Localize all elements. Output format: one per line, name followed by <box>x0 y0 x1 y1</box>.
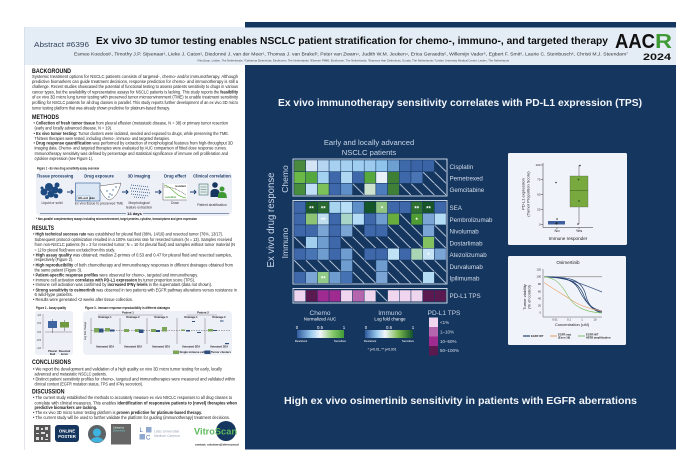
step: 3D imaging: 3D imaging <box>128 174 151 178</box>
panel: conclusions: advanced and metastatic NSCLC patients. <box>34 371 107 376</box>
panel: methods: Thirteen therapies were tested, including chemo-, immuno- and targeted therapies. <box>34 136 170 141</box>
figure 3: immune response reproducibility: Untreated SEA <box>152 344 170 348</box>
figure 2: assay quality: -0.5 <box>37 338 42 342</box>
card: PD-L1 box plot: Yes <box>576 228 582 233</box>
panel: background <box>32 69 239 110</box>
card: osimertinib curves <box>508 256 626 345</box>
y axis title: (Tumor Proportion Score) <box>526 171 530 217</box>
figure 2: assay quality: Resected <box>59 349 71 353</box>
card: osimertinib curves: Tumor viability <box>522 284 527 310</box>
online poster badge: ONLINE <box>59 428 75 434</box>
axis label: ex vivo drug response: Ex vivo drug response <box>266 172 277 268</box>
figure 2: assay quality <box>35 306 73 356</box>
panel: methods: • Collection of fresh tumor tissue from pleural effusion (metastatic disease, N = 38) or primary tumor resection <box>34 120 229 125</box>
figure 3: immune response reproducibility: Figure 3 - Immune response reproducibility in different drainages <box>85 306 170 310</box>
legend: PD-L1 TPS: 1–10% <box>440 330 454 334</box>
figure 3: immune response reproducibility: Log fold change <box>83 321 87 340</box>
y axis title: PD-L1 expression <box>520 178 526 210</box>
step: tissue processing: Liquid or solid <box>42 201 63 205</box>
logo: LUMC: L <box>140 428 144 434</box>
legend: PD-L1 TPS <box>428 310 461 356</box>
logo: university: Ziekenhuis <box>113 430 126 432</box>
significance stars: ** <box>309 206 314 212</box>
heatmap labels: immuno <box>450 205 493 282</box>
panel: discussion: • The ex vivo 3D micro tumor testing platform is proven predictive for platinum-based therapy. <box>33 410 202 415</box>
authors: Esmee Koedoot¹, Timothy J.P. Sijsenaar¹, Lieke J. Caton², Diedonné J. van der Meer¹, Thomas J. van Brakel³, Peter van Zwam⁴, Judith W.M. Jeuken⁴, Erica Geraedts⁵, Willemijn Vader⁵, Egbert F. Smit⁶, Laurie C. Steinbusch⁶, Christi M.J. Steendam⁷ <box>74 52 629 56</box>
figure 1 footnote: * Non-parallel complementary assays including microenvironment, target proteins, cytokine, transcriptome and gene expression <box>36 217 197 221</box>
y axis title <box>520 171 530 217</box>
step: drug exposure <box>75 174 124 206</box>
QR code <box>34 425 50 442</box>
card: osimertinib curves: 0.1 <box>567 318 571 322</box>
card: osimertinib curves: 10 <box>594 318 597 322</box>
card: osimertinib curves: 100 <box>537 275 542 279</box>
curve legend: (Exon 19) <box>558 336 570 340</box>
heatmap labels: immuno: Dostarlimab <box>450 240 483 248</box>
axis label: immuno: Immuno <box>280 227 290 258</box>
logo: university: Catharina <box>113 426 124 430</box>
legend: immuno: Resistant <box>364 339 376 343</box>
heatmap labels: immuno: Pembrolizumab <box>450 217 493 224</box>
top bar <box>245 22 676 28</box>
logo: LUMC <box>140 427 180 442</box>
significance stars: ** <box>321 276 326 282</box>
curve legend: EGFR WT <box>531 334 544 338</box>
abstract number: Abstract #6396 <box>34 40 89 49</box>
step: drug effect <box>163 174 187 205</box>
legend: chemo: Sensitive <box>334 339 346 343</box>
panel: conclusions: • We report the development and validation of a high quality ex vivo 3D micro tumor testing for early, locally <box>33 366 223 371</box>
panel: discussion <box>32 390 237 420</box>
logo: AACR 2024: 2024 <box>643 52 671 62</box>
panel: methods: cytokine expression (see Figure 1). <box>34 156 93 161</box>
card: osimertinib curves: 120 <box>537 267 542 271</box>
step: drug effect: Drug effect <box>164 174 187 178</box>
panel: background: Systemic treatment options for NSCLC patients consists of targeted-, chemo- and/or immunotherapy. Although <box>32 74 239 79</box>
card: osimertinib curves: Osimertinib <box>556 260 580 265</box>
panel: conclusions: • Distinct patient sensitivity profiles for chemo-, targeted and immunotherapies were measured and validated within <box>33 376 236 382</box>
card: osimertinib curves: 20 <box>538 304 541 308</box>
panel: background: of ex vivo 3D micro lung tumor testing with preserved tumor microenvironment (TME) to enable treatment sensitivity <box>32 95 239 100</box>
card: PD-L1 box plot: 0 <box>539 222 541 226</box>
title: Ex vivo 3D tumor testing enables NSCLC patient stratification for chemo-, immuno-, and targeted therapy <box>96 36 608 47</box>
legend: chemo <box>295 310 346 343</box>
logo: LUMC: Medisch Centrum <box>154 434 180 438</box>
panel: background: tumor testing platform that was already shown predictive for platinum-based therapy. <box>32 105 170 110</box>
legend: chemo: Normalized AUC <box>304 316 336 322</box>
card: osimertinib curves: Concentration (uM) <box>555 322 590 327</box>
step: 3D imaging <box>126 174 152 210</box>
figure 1: assay overview: Figure 1 - Ex vivo drug sensitivity assay overview <box>37 166 99 170</box>
curve legend: HER2 amplification <box>586 336 611 340</box>
step: 3D imaging: feature extraction <box>126 206 152 210</box>
heatmap labels: immuno: Ipilimumab <box>450 276 480 282</box>
legend: immuno: Sensitive <box>402 339 414 343</box>
legend: chemo: 1 <box>343 325 346 330</box>
panel: discussion: DISCUSSION <box>32 390 64 396</box>
panel: methods: Immunotherapy sensitivity was defined by percentage and statistical significance of immune cell proliferation and <box>34 151 229 156</box>
online poster badge <box>55 425 79 442</box>
curve legend: EGFR WT <box>586 332 599 336</box>
legend: PD-L1 TPS: PD-L1 TPS <box>428 310 461 317</box>
card: PD-L1 box plot: 25 <box>537 208 541 212</box>
significance stars <box>309 206 431 282</box>
panel: results <box>32 226 238 302</box>
heatmap label: PD-L1 TPS: PD-L1 TPS <box>450 293 481 300</box>
heatmap: chemo <box>293 159 447 196</box>
figure 3: immune response reproducibility: Tumor clusters <box>211 350 231 354</box>
legend: chemo: Resistant <box>295 339 307 343</box>
figure 2: assay quality: tumor <box>61 352 68 356</box>
figure 3: immune response reproducibility: Untreated SEA <box>124 344 142 348</box>
panel: background: challenge. Recent studies showcased the potential of functional testing to assess patients sensitivity to drugs in various <box>32 84 238 89</box>
panel: results: Subsequent protocol optimization resulted in a 100% success rate for resected tumors (N = 13). Samples received <box>34 237 233 242</box>
step: clinical correlation <box>193 174 231 207</box>
step: drug effect: sensitive <box>165 195 177 199</box>
panel: methods <box>32 115 233 161</box>
figure 3: immune response reproducibility: Drainage 1 <box>98 315 112 319</box>
panel: conclusions: CONCLUSIONS <box>32 360 71 366</box>
legend: chemo: 0 <box>296 325 299 330</box>
heatmap labels: chemo: Cisplatin <box>450 164 474 171</box>
panel: results: • High reproducibility of both chemotherapy and immunotherapy responses in different drainages obtained from <box>33 262 233 267</box>
card: PD-L1 box plot: 75 <box>537 178 541 182</box>
significance stars: * <box>427 253 430 259</box>
panel: background: profiling for NSCLC patients for all drug classes in parallel. This study reports further development of an ex vivo 3D micro <box>32 100 239 105</box>
panel: methods: imaging data. Chemo- and targeted therapies were evaluated by AUC comparison of fitted dose response curves. <box>34 146 227 151</box>
panel: background: cancer types, but the availability of representative assays for NSCLC patients is lacking. This study reports the feasibility <box>32 89 239 94</box>
heading: osimertinib: High ex vivo osimertinib sensitivity in patients with EGFR aberrations <box>284 395 637 407</box>
figure 1: assay overview <box>36 166 232 216</box>
card: osimertinib curves: (% of control) <box>526 284 532 309</box>
legend note: p-values: * p<0.01, ** p<0.001 <box>368 347 397 351</box>
card: osimertinib curves: 60 <box>538 289 541 293</box>
panel: background: predictive biomarkers can guide treatment decisions, response prediction for chemo- and immunotherapy is still a <box>32 79 239 84</box>
heading: immunotherapy: Ex vivo immunotherapy sensitivity correlates with PD-L1 expression (TPS) <box>278 97 642 109</box>
step: 3D imaging: Morphological <box>128 201 150 205</box>
step: drug exposure: Drug exposure <box>84 174 114 178</box>
legend: chemo: 0.5 <box>317 325 324 330</box>
panel: results: • Immune cell activation correlates with PD-L1 expression by tumor proportion score (TPS). <box>33 278 195 283</box>
figure 3: immune response reproducibility: Drainage 3 <box>154 315 168 319</box>
significance stars: ** <box>426 206 431 212</box>
step: clinical correlation: Patient stratification <box>197 203 227 207</box>
timeline: 14 days: 14 days <box>127 211 143 216</box>
heatmap labels: chemo <box>450 164 485 194</box>
step: tissue processing: Tissue processing <box>37 174 74 178</box>
legend: PD-L1 TPS: 50–100% <box>440 348 459 353</box>
heatmap labels: chemo: Gemcitabine <box>450 187 485 194</box>
axes <box>541 163 593 229</box>
card: PD-L1 box plot <box>508 153 627 245</box>
heatmap labels: immuno: Durvalumab <box>450 264 483 271</box>
heatmap: immuno <box>293 200 447 284</box>
box: no responder <box>548 182 565 225</box>
card: PD-L1 box plot: No <box>554 228 560 233</box>
significance stars: ** <box>321 206 326 212</box>
panel: results: • Immune cell activation was confirmed by increased IFNγ levels in the supernatant (data not shown). <box>33 282 212 287</box>
step: drug effect: Dose <box>171 201 179 205</box>
box: yes responder <box>570 165 588 225</box>
figure 3: immune response reproducibility: Drainage 2 <box>126 315 140 319</box>
figure 3: immune response reproducibility: Untreated SEA <box>182 344 200 348</box>
legend: immuno: Log fold change <box>374 316 406 322</box>
figure 3: immune response reproducibility: Untreated SEA <box>96 344 114 348</box>
online poster badge: POSTER <box>58 434 77 439</box>
logo: university <box>111 424 131 444</box>
logo: LUMC: C <box>146 436 151 442</box>
heatmap title: NSCLC patients <box>342 148 396 157</box>
card: osimertinib curves: 80 <box>538 282 541 286</box>
panel: results: • High technical success rate was established for pleural fluid (88%, 14/16) and resected tumor (76%, 13/17). <box>33 232 223 237</box>
panel: discussion: predictive biomarkers are lacking. <box>34 405 97 410</box>
heatmap labels: immuno: Atezolizumab <box>450 252 487 259</box>
panel: results: • High assay quality was obtained; median Z-primes of 0.53 and 0.47 for pleural fluid and resected samples, <box>33 252 232 257</box>
figure 2: assay quality: 0.0 <box>37 330 42 334</box>
significance stars: ** <box>414 206 420 212</box>
figure 2: assay quality: fluid <box>50 352 56 356</box>
card: PD-L1 box plot: 50 <box>537 192 541 196</box>
affiliations: ¹VitroScan, Leiden, The Netherlands; ²Catharina Ziekenhuis, Eindhoven, The Netherlands; ³Elsevier PMMI, Eindhoven, The Netherlands; ⁴Erasmus Hart Ziekenhuis, Gouda, The Netherlands; ⁵Leiden University Medical Center, Leiden, The Netherlands <box>197 58 510 62</box>
card: osimertinib curves: 1 <box>581 318 583 322</box>
panel: conclusions <box>32 360 236 386</box>
legend: immuno: 0 <box>365 325 368 330</box>
logos row <box>34 421 239 446</box>
arrow <box>122 190 128 194</box>
figure 2: assay quality: 1.0 <box>37 313 42 317</box>
logo: VitroScan: VitroScan <box>194 426 237 438</box>
heatmap title <box>324 138 414 157</box>
logo: VitroScan: contact: solutions@vitroscan.nl <box>195 442 239 446</box>
curve legend: EGFR mut <box>558 332 571 336</box>
heatmap labels: immuno: Nivolumab <box>450 228 479 236</box>
logo: AACR 2024: R <box>655 31 673 53</box>
panel: background: BACKGROUND <box>32 69 72 75</box>
axis label: chemo: Chemo <box>280 165 290 193</box>
logo: AACR 2024 <box>615 31 673 62</box>
figure 2: assay quality: Figure 2 - Assay quality <box>36 306 66 310</box>
figure 3: immune response reproducibility: Single immune cells <box>180 350 207 354</box>
curve legend <box>523 332 611 340</box>
legend: immuno <box>364 310 415 343</box>
panel: discussion: • The current study established the methods to accurately measure ex vivo NSCLC responses to all drug classes to <box>33 395 233 400</box>
figure 2: assay quality: Pleural <box>48 349 57 353</box>
figure 3: immune response reproducibility: Drainage 1 <box>184 315 198 319</box>
heatmap: PD-L1 TPS <box>293 288 447 303</box>
panel: results: • Results were generated <2 weeks after tissue collection. <box>33 297 133 302</box>
panel: results: = 12 for pleural fluid) were excluded from this study. <box>34 248 115 253</box>
figure 2: assay quality: -1.0 <box>37 346 42 350</box>
card: osimertinib curves: 0 <box>540 311 542 315</box>
panel: methods: METHODS <box>32 115 59 121</box>
dose-response curves <box>544 277 602 313</box>
card: osimertinib curves: 0.01 <box>552 318 558 322</box>
legend: PD-L1 TPS: <1% <box>440 320 449 325</box>
significance stars: ** <box>321 218 326 224</box>
panel: results: • Strong sensitivity to osimertinib was observed in two patients with EGFR pathway alterations versus resistance in <box>33 288 238 292</box>
heatmap title: Early and locally advanced <box>324 138 414 147</box>
legend: chemo: Chemo <box>310 310 331 317</box>
author photo <box>88 425 106 443</box>
panel: conclusions: clinical context (EGFR mutation status, TPS and IFNγ secretion). <box>34 381 143 386</box>
panel: discussion: • The current study will be used to further validate the platform for guiding (immunotherapy) treatment decisions. <box>33 415 230 420</box>
header <box>34 31 673 62</box>
panel: results: 6 wild-type patients. <box>34 292 73 297</box>
legend: immuno: 0.5 <box>386 325 393 330</box>
arrow <box>67 190 73 194</box>
legend: immuno: 1 <box>412 325 415 330</box>
panel: discussion: correlate with clinical measures. This enables identification of responsive patients to (novel) therapies when <box>34 400 237 406</box>
arrow <box>190 190 196 194</box>
figure 3: immune response reproducibility <box>83 306 232 355</box>
heatmap labels: immuno: SEA <box>450 205 463 212</box>
significance stars: * <box>381 206 384 212</box>
panel: methods: • Ex vivo tumor testing: Tumor clusters were isolated, seeded and exposed to drugs, while preserving the TME. <box>34 131 229 136</box>
panel: results: respectively (Figure 2). <box>34 257 73 262</box>
card: osimertinib curves: 40 <box>538 297 541 301</box>
panel: methods: • Drug response quantification was performed by extraction of morphological features from high-throughput 3D <box>34 141 233 146</box>
figure 2: assay quality: 0.5 <box>37 321 42 325</box>
heatmap labels: chemo: Pemetrexed <box>450 176 483 182</box>
panel: results: from non-NSCLC patients (N = 2 for resected tumor; N = 10 for pleural fluid) and samples without tumor material (N <box>34 242 235 247</box>
legend: immuno: Immuno <box>378 310 402 317</box>
significance stars: * <box>416 218 419 224</box>
step: drug exposure: 384-well plate <box>78 196 95 200</box>
figure 3: immune response reproducibility: Patient 2 <box>197 310 209 314</box>
panel: results: the same patient (Figure 3). <box>34 268 82 272</box>
arrow <box>155 190 161 194</box>
logo: AACR 2024: AAC <box>615 31 655 53</box>
figure 3: immune response reproducibility: Drainage 2 <box>212 315 226 319</box>
step: clinical correlation: Clinical correlation <box>193 174 231 178</box>
logo: LUMC: Leids Universitair <box>154 430 180 434</box>
panel: results: • Patient-specific response profiles were observed for chemo-, targeted and immunotherapy. <box>33 273 198 278</box>
step: tissue processing <box>37 174 74 205</box>
figure 3: immune response reproducibility: Patient 1 <box>122 310 134 314</box>
panel: right navy <box>245 65 676 450</box>
step: drug exposure: Ex vivo tissue to preserved TME <box>75 202 124 206</box>
card: PD-L1 box plot: Immune responder <box>549 236 588 241</box>
step: drug effect: resistant <box>175 184 186 188</box>
legend: PD-L1 TPS: 10–50% <box>440 339 457 344</box>
panel: results: RESULTS <box>32 226 54 232</box>
logo: VitroScan <box>194 421 239 446</box>
figure 3: immune response reproducibility: Untreated SEA <box>210 344 228 348</box>
card: PD-L1 box plot: 100 <box>535 163 541 167</box>
panel: methods: (early and locally advanced disease, N = 19). <box>34 125 112 130</box>
